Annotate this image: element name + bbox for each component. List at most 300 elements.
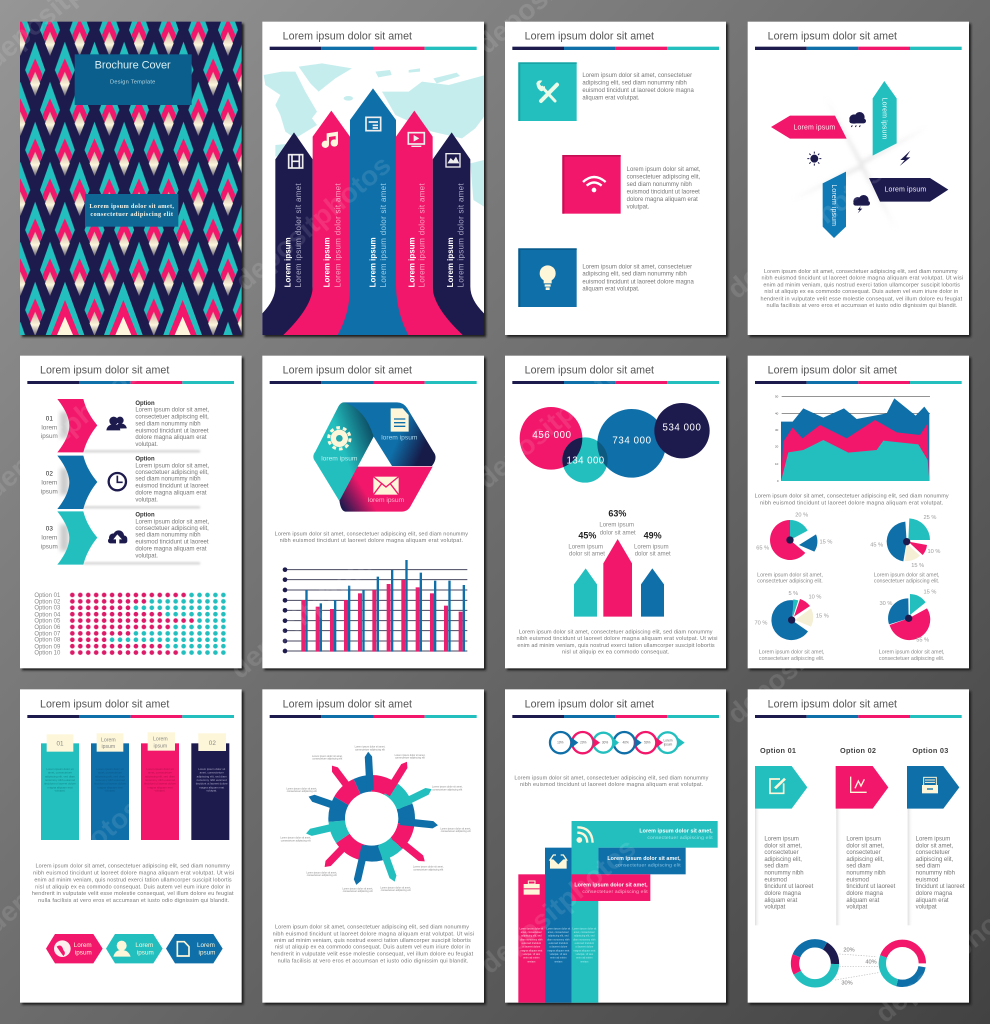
spoke labels: Lorem ipsum dolor sit amet,	[395, 754, 426, 757]
arrow: pink 63%	[603, 539, 632, 617]
hexagon button: blue: ipsum	[199, 950, 215, 957]
column: teal: volutpat.	[55, 788, 66, 792]
page heading: Lorem ipsum dolor sit amet	[525, 30, 654, 42]
band small text: ut laoreet dolore	[522, 946, 541, 949]
option 2 text: euismod tincidunt ut laoreet	[135, 484, 209, 490]
donut left	[795, 943, 835, 983]
text block	[514, 775, 709, 788]
row 3 right: chain steps and three options pages	[505, 689, 971, 1005]
band: blue: Lorem ipsum dolor sit amet,	[607, 856, 681, 862]
arrow: blue 49%	[641, 568, 664, 617]
page heading: Lorem ipsum dolor sit amet	[283, 699, 412, 711]
option 2 text: Lorem ipsum	[846, 837, 881, 843]
option 3 text: Option	[135, 512, 155, 518]
page heading: Lorem ipsum dolor sit amet	[283, 30, 412, 42]
option 1 text: Lorem ipsum dolor sit amet,	[135, 408, 210, 414]
option 1 text: sed diam nonummy nibh	[135, 421, 201, 427]
option 3 text	[916, 837, 965, 911]
band small text: euismod tincidunt	[549, 942, 568, 945]
pie chart 4: 55 %	[916, 638, 929, 644]
spoke labels: consectetuer adipiscing elit	[355, 748, 385, 751]
option 3 text: dolor sit amet,	[916, 843, 954, 849]
icon: video	[408, 133, 424, 147]
arrow: pink left	[283, 111, 350, 335]
area chart: 10	[775, 462, 779, 466]
arrow: pink chart	[836, 766, 888, 809]
donut right	[882, 943, 922, 983]
dot chart labels: Option 09	[34, 644, 61, 650]
option 1 text: Lorem ipsum	[764, 837, 799, 843]
page shadow	[507, 358, 971, 670]
pie chart 3: 10 %	[809, 594, 821, 600]
text: pink square	[627, 167, 701, 210]
column: teal: Lorem ipsum dolor sit	[46, 767, 74, 771]
text: teal square	[582, 73, 694, 101]
column: pink: nonummy nibh euismod	[145, 778, 175, 782]
page shadow	[507, 691, 971, 1005]
dot chart labels	[34, 593, 61, 657]
pie chart 3: 5 %	[788, 591, 798, 597]
text: blue square: euismod tincidunt ut laoreet dolore magna	[582, 279, 694, 285]
area chart: 50	[775, 395, 779, 399]
arrow: blue centre	[338, 88, 408, 335]
text: pink square: dolore magna aliquam erat	[627, 197, 698, 203]
option 2 text: euismod	[846, 877, 869, 883]
text: pink square: volutpat.	[627, 204, 650, 210]
row 2 left: options and bar chart pages	[20, 356, 486, 670]
text: pink square: Lorem ipsum dolor sit amet,	[627, 167, 701, 173]
text block: nisl ut aliquip ex ea commodo consequat. Duis autem vel eum iriure dolor in	[35, 884, 230, 890]
arrow: teal up: Lorem ipsum	[880, 98, 887, 140]
band small text: diam nonummy nibh	[573, 938, 596, 941]
text: pink square: consectetuer adipiscing elit,	[627, 174, 701, 180]
page heading: Lorem ipsum dolor sit amet	[525, 699, 654, 711]
option 3 text: euismod	[916, 877, 938, 883]
bubble chart: 456 000	[532, 430, 571, 441]
panel: tabbed columns	[20, 689, 242, 1003]
bubble chart: 134 000	[566, 456, 604, 467]
option 2 text: adipiscing elit,	[846, 857, 884, 863]
ribbon labels: lorem	[41, 480, 57, 487]
band small text: Lorem ipsum dolor sit	[572, 927, 597, 930]
arrow: navy right: Lorem ipsum	[884, 187, 926, 194]
spoke labels: consectetuer adipiscing elit	[287, 790, 317, 793]
donut labels: 40%	[865, 959, 877, 965]
watermarks: depositphotos	[721, 157, 889, 305]
option 2 text: volutpat	[846, 905, 868, 911]
spoke labels: Lorem ipsum dolor sit amet,	[432, 786, 463, 789]
ribbon shadows	[83, 450, 200, 564]
cover title box: Brochure Cover	[95, 60, 171, 72]
column: navy: nonummy nibh euismod	[197, 778, 227, 782]
dot chart labels: Option 08	[34, 638, 61, 644]
column: teal: amet, consectetuer	[48, 771, 72, 775]
spoke labels: consectetuer adipiscing elit	[432, 788, 463, 791]
band small text: Lorem ipsum dolor sit	[546, 927, 571, 930]
donut connectors	[835, 954, 878, 980]
page heading: Lorem ipsum dolor sit amet	[768, 365, 897, 377]
page shadow	[22, 24, 486, 337]
bubble chart: 734 000	[612, 436, 651, 447]
hexagon button: teal	[106, 934, 163, 963]
pie captions: Lorem ipsum dolor sit amet,	[874, 572, 940, 578]
arrow labels: Lorem ipsum	[568, 544, 603, 550]
ribbon labels: lorem	[41, 535, 57, 542]
ribbon labels: ipsum	[41, 488, 58, 495]
option 2 text: consectetuer adipiscing elit,	[135, 470, 209, 476]
page heading	[512, 30, 719, 50]
option 2 text: nonummy nibh	[846, 871, 886, 877]
page heading: Lorem ipsum dolor sit amet	[40, 699, 169, 711]
option 1 text: dolor sit amet,	[764, 843, 802, 849]
option 3 text: nonummy nibh	[916, 871, 955, 877]
panel: brochure cover	[20, 22, 242, 335]
pie captions: consectetuer adipiscing elit.	[757, 578, 823, 584]
bubble chart: 534 000	[662, 423, 701, 434]
pie chart 3: 15 %	[816, 614, 829, 620]
chain of circles: 20%	[580, 741, 587, 745]
option 2 text: tincidunt ut laoreet	[846, 884, 896, 890]
band small text	[572, 927, 597, 963]
spoke labels: consectetuer adipiscing elit	[395, 757, 425, 760]
option 1 text	[135, 401, 210, 448]
pie chart 4: 30 %	[880, 601, 892, 607]
arrow labels: 49%	[644, 530, 662, 540]
page heading: Lorem ipsum dolor sit amet	[768, 30, 897, 42]
hexagon labels: lorem ipsum	[368, 497, 405, 504]
text block: nisl ut aliquip ex ea commodo consequat. Duis autem vel eum iriure dolor in	[275, 945, 470, 951]
text block: hendrerit in vulputate velit esse molestie consequat, vel illum dolore eu feugiat	[271, 952, 474, 958]
hexagon labels	[321, 434, 418, 504]
panel: options list	[20, 356, 242, 668]
area chart: 30	[775, 428, 779, 432]
text block: nibh euismod tincidunt ut laoreet dolore magna aliquam erat volutpat. Ut wisi	[761, 276, 963, 282]
option 2 text	[135, 456, 210, 503]
ribbon side shadows	[60, 412, 69, 551]
column: pink: Lorem	[153, 737, 168, 743]
option 1 text: sed diam	[764, 864, 789, 870]
bar chart	[283, 560, 467, 653]
hexagon labels: lorem ipsum	[321, 456, 358, 463]
page heading	[270, 699, 477, 718]
option 1 text: volutpat	[764, 905, 786, 911]
page heading	[512, 699, 719, 718]
page heading	[755, 30, 962, 50]
page heading	[270, 30, 477, 50]
band: teal: consectetuer adipiscing elit	[647, 835, 713, 841]
panel: bubbles and arrows	[505, 356, 726, 668]
spoke labels: Lorem ipsum dolor sit amet,	[280, 837, 311, 840]
panel: chain and staircase	[505, 689, 726, 1003]
band small text: magna aliquam erat	[520, 949, 543, 952]
chain of circles: 50%	[644, 741, 651, 745]
option 1 text: tincidunt ut laoreet	[764, 884, 814, 890]
option 1 text: euismod tincidunt ut laoreet	[135, 428, 209, 434]
spoke labels: consectetuer adipiscing elit	[343, 890, 373, 893]
option 1 text: Option	[135, 401, 155, 407]
donut labels	[841, 947, 877, 987]
option 1 text: adipiscing elit,	[764, 857, 802, 863]
option 3 text: euismod tincidunt ut laoreet	[135, 540, 209, 546]
pie chart 2: 15 %	[911, 563, 924, 569]
pie chart 3: 70 %	[755, 621, 767, 627]
column shadows	[755, 809, 913, 925]
band small text: magna aliquam erat	[573, 949, 596, 952]
option 3 text: Lorem ipsum	[916, 837, 950, 843]
arrow labels: Lorem ipsum	[407, 237, 416, 287]
pie chart 1	[756, 512, 832, 560]
cover bottom row chevrons	[41, 275, 207, 335]
row 1 right: icon squares and weather pages	[505, 22, 971, 337]
band small text: volutpat. Ut wisi	[576, 953, 593, 956]
chain of circles: ipsum	[664, 743, 673, 747]
pie chart 3	[755, 591, 829, 640]
spoke labels: Lorem ipsum dolor sit amet,	[286, 787, 317, 790]
arrow labels: Lorem ipsum	[322, 237, 331, 287]
spoke labels: consectetuer adipiscing elit	[307, 874, 337, 877]
text block: enim ad minim veniam, quis nostrud exerci tation ullamcorper suscipit lobortis	[34, 877, 232, 883]
area chart: 0	[777, 479, 779, 483]
pie chart 2	[870, 515, 940, 569]
text block: Lorem ipsum dolor sit amet, consectetuer adipiscing elit, sed diam nonummy	[514, 775, 709, 781]
option headings: Option 01	[760, 746, 796, 755]
arrow labels: dolor sit amet	[635, 552, 671, 558]
icon: film	[289, 155, 303, 168]
panel: donut spokes	[262, 689, 484, 1003]
option 3 text: sed diam nonummy nibh	[135, 533, 201, 539]
pie chart 2: 10 %	[928, 549, 940, 555]
column: navy: magna aliquam erat	[199, 785, 224, 789]
text block: nibh euismod tincidunt ut laoreet dolore magna aliquam erat volutpat. Ut wisi	[33, 870, 234, 876]
cover subtitle box: consectetuer adipiscing elit	[90, 211, 174, 218]
spoke labels: Lorem ipsum dolor sit amet,	[355, 746, 386, 749]
band small text: euismod tincidunt	[522, 942, 541, 945]
cover title box: Design Template	[110, 80, 155, 86]
column: blue: Lorem ipsum dolor sit	[96, 767, 124, 771]
watermarks: depositphotos	[471, 347, 639, 495]
option 1 text: consectetuer	[764, 850, 799, 856]
text: teal square: adipiscing elit, sed diam nonummy nibh	[582, 80, 687, 86]
chain of circles: 30%	[602, 741, 608, 745]
panel: icon squares	[505, 22, 726, 335]
spoke labels: Lorem ipsum dolor sit amet,	[413, 866, 444, 869]
icon: music	[322, 132, 338, 148]
ribbon labels: lorem	[41, 424, 57, 431]
donut labels: 30%	[841, 981, 853, 987]
icon: image	[446, 154, 460, 167]
page heading: Lorem ipsum dolor sit amet	[40, 365, 169, 377]
arrow labels	[568, 509, 671, 558]
icon: inbox	[550, 854, 567, 869]
text block: Lorem ipsum dolor sit amet, consectetuer adipiscing elit, sed diam nonummy	[275, 531, 468, 537]
band small text: ut laoreet dolore	[575, 946, 594, 949]
band: pink: consectetuer adipiscing elit	[582, 889, 648, 895]
column: blue: Lorem	[101, 737, 116, 743]
option 3 text: aliquam erat	[916, 898, 949, 904]
cover title box	[75, 54, 192, 105]
column: pink: tincidunt ut laoreet dolore	[144, 782, 176, 786]
band small text: amet, consectetuer	[574, 931, 595, 934]
icon: storm cloud	[853, 195, 870, 213]
spoke labels	[280, 746, 471, 893]
column: teal: magna aliquam erat	[47, 785, 73, 789]
page heading: Lorem ipsum dolor sit amet	[525, 365, 654, 377]
pie captions: Lorem ipsum dolor sit amet,	[757, 572, 823, 578]
hexagon button: teal: ipsum	[137, 950, 154, 957]
spoke labels: consectetuer adipiscing elit	[312, 758, 343, 761]
option 1 text: volutpat.	[135, 442, 158, 448]
text: blue square: adipiscing elit, sed diam nonummy nibh	[582, 272, 687, 278]
spoke labels: Lorem ipsum dolor sit amet,	[306, 871, 337, 874]
pie captions: consectetuer adipiscing elit.	[759, 656, 824, 662]
spoke labels: Lorem ipsum dolor sit amet,	[440, 827, 471, 830]
donut labels: 20%	[843, 947, 855, 953]
icon: clock	[109, 473, 126, 490]
ribbon: blue	[57, 456, 97, 509]
ribbon: teal	[57, 511, 97, 565]
arrow labels: dolor sit amet	[569, 552, 605, 558]
option 1 text: dolore magna	[764, 891, 802, 897]
column: pink: volutpat.	[155, 788, 166, 792]
area chart	[775, 395, 930, 483]
arrow labels: Lorem ipsum	[446, 237, 455, 287]
band small text: adipiscing elit, sed	[521, 935, 542, 938]
arrow: blue tray	[907, 766, 959, 809]
text block: nibh euismod tincidunt ut laoreet dolore magna aliquam erat volutpat.	[280, 538, 463, 544]
band: teal	[572, 821, 718, 1003]
hexagon band: blue	[344, 402, 436, 466]
column: blue: adipiscing elit, sed diam	[95, 774, 126, 778]
band small text: enim ad minim	[576, 957, 592, 960]
band small text	[519, 927, 544, 963]
option headings	[760, 746, 948, 755]
option 2 text: consectetuer	[846, 850, 881, 856]
text: teal square: euismod tincidunt ut laoreet dolore magna	[582, 88, 694, 94]
arrow: navy right	[433, 132, 484, 335]
band small text: diam nonummy nibh	[547, 938, 570, 941]
dot chart	[68, 592, 227, 656]
panel: weather arrows	[748, 22, 969, 335]
column: teal: tincidunt ut laoreet dolore	[44, 782, 76, 786]
icon: sun	[807, 152, 821, 166]
text block: Lorem ipsum dolor sit amet, consectetuer adipiscing elit, sed diam nonummy	[755, 494, 949, 500]
text block: Lorem ipsum dolor sit amet, consectetuer adipiscing elit, sed diam nonummy	[519, 629, 713, 635]
pie captions: Lorem ipsum dolor sit amet,	[879, 650, 945, 656]
text block	[760, 269, 963, 309]
hexagon button: pink	[46, 934, 103, 963]
arrow: navy left	[262, 132, 313, 335]
text: pink square: sed diam nonummy nibh	[627, 182, 692, 188]
page shadow	[22, 691, 486, 1005]
icon: envelope	[373, 477, 399, 495]
text block: nibh euismod tincidunt ut laoreet dolore magna aliquam erat volutpat. Ut wisi	[273, 931, 474, 937]
pie captions: Lorem ipsum dolor sit amet,	[759, 650, 825, 656]
pie chart 2: 45 %	[870, 542, 883, 548]
text block: hendrerit in vulputate velit esse molestie consequat, vel illum dolore eu feugiat	[32, 891, 234, 897]
arrow labels: 45%	[578, 530, 596, 540]
pie captions: consectetuer adipiscing elit.	[874, 578, 939, 584]
option 1 text: nonummy nibh	[764, 871, 804, 877]
watermarks: depositphotos	[229, 149, 397, 297]
column: navy: volutpat.	[206, 788, 217, 792]
text block: enim ad minim veniam, quis nostrud exerci tation ullamcorper suscipit lobortis	[517, 643, 715, 649]
column: pink: magna aliquam erat	[147, 785, 173, 789]
dot chart labels: Option 04	[34, 612, 61, 618]
chain of circles: 10%	[557, 741, 564, 745]
cover subtitle box: Lorem ipsum dolor sit amet,	[89, 203, 174, 210]
pie captions: consectetuer adipiscing elit.	[879, 656, 944, 662]
page heading	[755, 699, 962, 718]
option headings: Option 02	[840, 746, 876, 755]
text block: nisl ut aliquip ex ea commodo consequat. Duis autem vel eum iriure dolor in	[764, 289, 958, 295]
icon: rss	[577, 827, 593, 843]
arrow labels: Lorem ipsum	[634, 544, 669, 550]
option 1 text: dolore magna aliquam erat	[135, 435, 207, 441]
hexagon button: blue: Lorem	[197, 942, 215, 949]
icon: rain cloud	[849, 112, 866, 127]
area chart: 40	[775, 411, 779, 415]
text block: nisl ut aliquip ex ea commodo consequat.	[562, 650, 670, 656]
pie chart 1: 20 %	[795, 512, 808, 518]
text block	[275, 531, 468, 544]
arrow labels: dolor sit amet	[600, 530, 636, 536]
square: blue bulb	[518, 248, 577, 307]
ribbon labels: ipsum	[41, 433, 58, 440]
band small text: volutpat. Ut wisi	[550, 953, 567, 956]
band small text: magna aliquam erat	[547, 949, 570, 952]
hexagon band: teal	[313, 402, 374, 501]
text block: enim ad minim veniam, quis nostrud exerci tation ullamcorper suscipit lobortis	[763, 282, 960, 288]
band: teal: Lorem ipsum dolor sit amet,	[639, 829, 713, 835]
text block	[271, 924, 474, 964]
band small text: amet, consectetuer	[548, 931, 569, 934]
arrow: blue down	[823, 172, 846, 238]
page shadow	[507, 24, 971, 337]
icon: news	[366, 117, 381, 131]
icon: cloud upload	[108, 530, 127, 544]
option 3 text: Lorem ipsum dolor sit amet,	[135, 519, 210, 525]
column: blue	[91, 733, 129, 840]
text block: nulla facilisis at vero eros et accumsan et iusto odio dignissim qui blandit.	[38, 898, 230, 904]
dot chart labels: Option 06	[34, 625, 61, 631]
arrow labels: Lorem ipsum	[368, 237, 377, 287]
column: pink: amet, consectetuer	[148, 771, 172, 775]
band: blue: consectetuer adipiscing elit	[615, 862, 681, 868]
option 1 text	[764, 837, 814, 911]
arrow labels: Lorem ipsum	[599, 523, 634, 529]
arrow: pink right	[396, 111, 463, 335]
column: blue: volutpat.	[105, 788, 116, 792]
ribbon labels: 02	[46, 471, 53, 478]
column: blue: ipsum	[101, 744, 115, 750]
column: pink	[141, 732, 179, 840]
column: navy: amet, consectetuer	[200, 771, 224, 775]
hexagon labels: lorem ipsum	[381, 434, 418, 441]
band small text: euismod tincidunt	[575, 942, 594, 945]
option 2 text: dolore magna	[846, 891, 884, 897]
arrow labels	[284, 183, 466, 287]
pie chart 4	[880, 590, 936, 644]
text block: enim ad minim veniam, quis nostrud exerci tation ullamcorper suscipit lobortis	[274, 938, 471, 944]
arrow labels: 63%	[608, 509, 626, 519]
watermarks: depositphotos	[224, 537, 392, 685]
option 3 text: consectetuer adipiscing elit,	[135, 526, 209, 532]
band: pink	[518, 874, 650, 1003]
ribbon: pink	[57, 399, 97, 452]
square: pink wifi	[562, 155, 621, 214]
band small text: veniam	[580, 960, 588, 963]
chain of circles: 40%	[623, 741, 629, 745]
